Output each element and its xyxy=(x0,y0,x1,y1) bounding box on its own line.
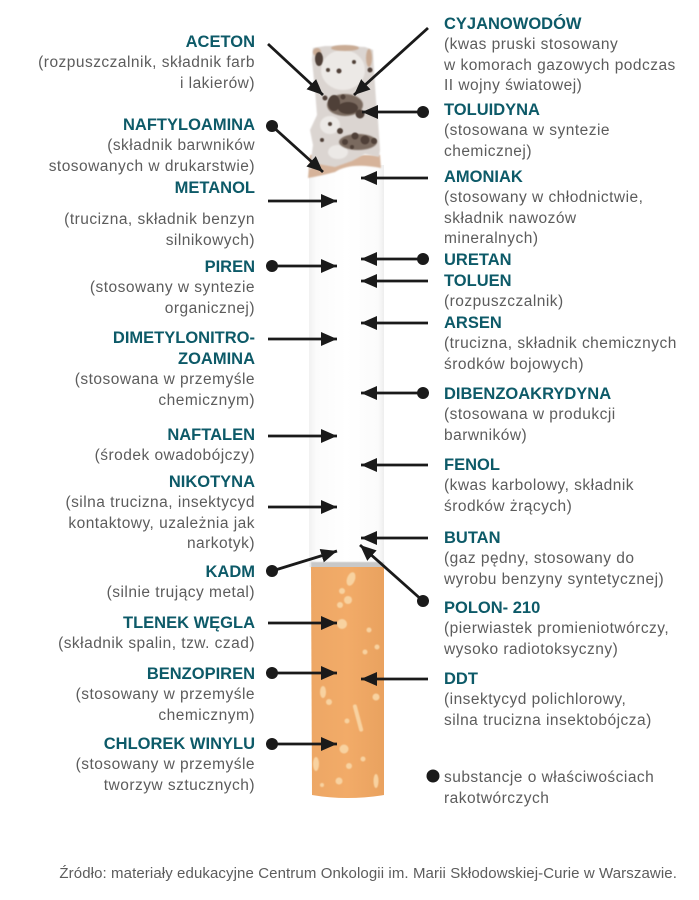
label: benzopiren: chemicznym) xyxy=(158,707,255,724)
label: amoniak xyxy=(444,168,643,247)
label: piren: PIREN xyxy=(205,258,255,276)
label: dimetylonitrozoamina: ZOAMINA xyxy=(178,350,255,368)
source note: Źródło: materiały edukacyjne Centrum Onkologii im. Marii Skłodowskiej-Curie w Warszawie. xyxy=(59,865,677,882)
label: chlorek winylu: (stosowany w przemyśle xyxy=(76,756,255,773)
label: naftalen xyxy=(95,426,255,464)
label: toluen: TOLUEN xyxy=(444,272,512,290)
burnt edge xyxy=(308,155,381,178)
label: ddt xyxy=(444,670,652,729)
label: toluidyna: TOLUIDYNA xyxy=(444,101,540,119)
label: polon-210 xyxy=(444,599,669,658)
label: amoniak: mineralnych) xyxy=(444,230,538,247)
legend: substancje o właściwościach xyxy=(444,769,654,786)
label: aceton: i lakierów) xyxy=(180,75,255,92)
label: dimetylonitrozoamina: (stosowana w przemyśle xyxy=(75,371,255,388)
label: butan: wyrobu benzyny syntetycznej) xyxy=(444,571,664,588)
label: amoniak: składnik nawozów xyxy=(444,210,577,227)
label: aceton xyxy=(38,33,255,92)
label: aceton: ACETON xyxy=(186,33,255,51)
label: naftyloamina: NAFTYLOAMINA xyxy=(123,116,255,134)
label: cyjanowodów: II wojny światowej) xyxy=(444,77,582,94)
label: chlorek winylu xyxy=(76,735,255,794)
label: metanol: silnikowych) xyxy=(166,232,255,249)
label: kadm xyxy=(107,563,255,601)
label: metanol xyxy=(64,179,255,249)
label: nikotyna xyxy=(65,473,255,552)
label: piren: organicznej) xyxy=(165,300,255,317)
label: naftyloamina xyxy=(49,116,255,175)
label: dibenzoakrydyna: DIBENZOAKRYDYNA xyxy=(444,385,611,403)
label: fenol: (kwas karbolowy, składnik xyxy=(444,477,634,494)
label: ddt: (insektycyd polichlorowy, xyxy=(444,691,626,708)
label: nikotyna: narkotyk) xyxy=(187,535,255,552)
label: cyjanowodów: (kwas pruski stosowany xyxy=(444,36,618,53)
label: fenol xyxy=(444,456,634,515)
label: naftalen: (środek owadobójczy) xyxy=(95,447,255,464)
label: piren xyxy=(90,258,255,317)
label: dimetylonitrozoamina: DIMETYLONITRO- xyxy=(113,329,255,347)
label: metanol: METANOL xyxy=(175,179,255,197)
label: polon-210: (pierwiastek promieniotwórczy, xyxy=(444,620,669,637)
label: toluidyna xyxy=(444,101,610,160)
label: uretan: URETAN xyxy=(444,251,512,269)
label: benzopiren: (stosowany w przemyśle xyxy=(76,686,255,703)
label: toluidyna: chemicznej) xyxy=(444,143,532,160)
label: polon-210: POLON- 210 xyxy=(444,599,540,617)
label: dibenzoakrydyna: barwników) xyxy=(444,427,527,444)
label: butan xyxy=(444,529,664,588)
label: dimetylonitrozoamina xyxy=(75,329,255,409)
label: nikotyna: kontaktowy, uzależnia jak xyxy=(68,515,255,532)
label: tlenek węgla xyxy=(58,614,255,652)
label: arsen: środków bojowych) xyxy=(444,356,584,373)
label: polon-210: wysoko radiotoksyczny) xyxy=(444,641,618,658)
legend: rakotwórczych xyxy=(444,790,549,807)
label: dibenzoakrydyna: (stosowana w produkcji xyxy=(444,406,616,423)
legend xyxy=(444,769,654,807)
label: benzopiren: BENZOPIREN xyxy=(147,665,255,683)
label: dimetylonitrozoamina: chemicznym) xyxy=(158,392,255,409)
label: dibenzoakrydyna xyxy=(444,385,616,444)
label: toluidyna: (stosowana w syntezie xyxy=(444,122,610,139)
label: chlorek winylu: tworzyw sztucznych) xyxy=(104,777,255,794)
label: metanol: (trucizna, składnik benzyn xyxy=(64,211,255,228)
label: cyjanowodów xyxy=(444,14,676,94)
label: nikotyna: NIKOTYNA xyxy=(169,473,255,491)
label: kadm: (silnie trujący metal) xyxy=(107,584,255,601)
label: arsen: ARSEN xyxy=(444,314,502,332)
label: cyjanowodów: CYJANOWODÓW xyxy=(444,15,582,33)
label: naftalen: NAFTALEN xyxy=(167,426,255,444)
label: benzopiren xyxy=(76,665,255,724)
label: piren: (stosowany w syntezie xyxy=(90,279,255,296)
label: tlenek węgla: TLENEK WĘGLA xyxy=(123,614,255,632)
label: butan: (gaz pędny, stosowany do xyxy=(444,550,634,567)
label: fenol: FENOL xyxy=(444,456,500,474)
label: ddt: silna trucizna insektobójcza) xyxy=(444,712,652,729)
label: amoniak: AMONIAK xyxy=(444,168,523,186)
label: toluen xyxy=(444,272,564,310)
label: arsen: (trucizna, składnik chemicznych xyxy=(444,335,677,352)
label: cyjanowodów: w komorach gazowych podczas xyxy=(444,57,676,74)
label: aceton: (rozpuszczalnik, składnik farb xyxy=(38,54,255,71)
arrows xyxy=(268,28,428,744)
label: toluen: (rozpuszczalnik) xyxy=(444,293,564,310)
label: tlenek węgla: (składnik spalin, tzw. czad) xyxy=(58,635,255,652)
label: amoniak: (stosowany w chłodnictwie, xyxy=(444,189,643,206)
label: ddt: DDT xyxy=(444,670,478,688)
ash xyxy=(309,46,380,170)
label: arsen xyxy=(444,314,677,373)
label: nikotyna: (silna trucizna, insektycyd xyxy=(65,494,255,511)
label: kadm: KADM xyxy=(206,563,255,581)
label: butan: BUTAN xyxy=(444,529,501,547)
label: fenol: środków żrących) xyxy=(444,498,572,515)
label: naftyloamina: (składnik barwników xyxy=(107,137,255,154)
label: naftyloamina: stosowanych w drukarstwie) xyxy=(49,158,255,175)
label: chlorek winylu: CHLOREK WINYLU xyxy=(104,735,255,753)
